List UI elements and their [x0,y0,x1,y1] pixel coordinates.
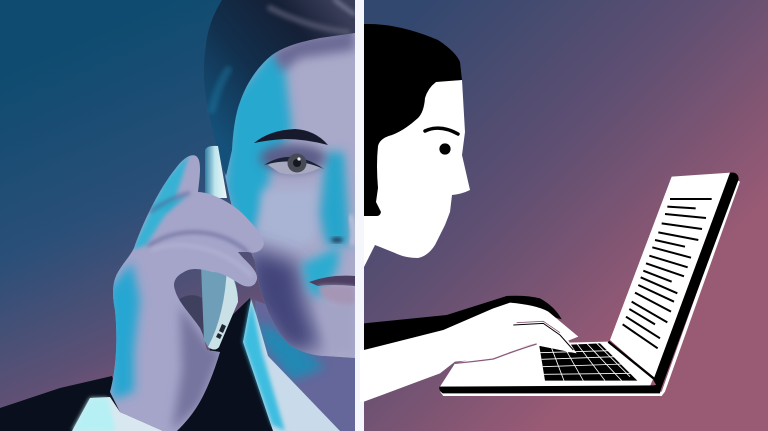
eyebrow [425,128,458,134]
mouth [309,276,355,304]
eye [439,143,451,155]
center divider [355,0,364,431]
nose [331,215,354,245]
laptop, hands and keyboard [360,173,740,402]
eye [264,154,324,175]
hair highlights [212,0,354,110]
white arm and hand [360,303,578,402]
hair [204,0,355,176]
screen text lines [623,199,712,348]
thumb and deck outline [455,344,537,363]
cyan light: cheek and nose [320,152,350,245]
cyan light: forehead and temple [225,50,292,250]
keyboard [539,343,637,381]
panel: photographic half [0,0,360,431]
cyan edge light on the hand [108,262,140,400]
right gradient background [364,0,768,431]
black hair [364,24,462,216]
left gradient background [0,0,265,431]
finger creases [148,193,248,252]
phone [200,146,238,350]
hinge line [608,342,654,379]
under-eye lower-cheek tone [258,188,318,250]
forehead shadow under the hair [272,30,355,72]
face [224,33,355,358]
neck [255,300,355,431]
laptop deck [440,342,653,387]
panel: flat illustration half [360,0,768,431]
chin [318,300,355,355]
head and neck silhouette [364,80,470,267]
thumb behind the phone [178,295,204,335]
black sleeve [364,296,562,350]
laptop base strip [439,384,662,393]
jacket [0,298,275,431]
shirt collar [243,299,340,431]
screen bezel [653,173,739,392]
finger gap [513,323,573,350]
palm shadow [172,305,222,431]
screen outer glow edge [440,180,740,396]
hand [110,155,264,431]
shadowed cheek [245,245,322,352]
eye socket shadow [260,144,326,172]
cyan around mouth [302,246,340,298]
screen [610,173,731,378]
eyebrow [254,129,328,145]
cuff [72,397,163,431]
